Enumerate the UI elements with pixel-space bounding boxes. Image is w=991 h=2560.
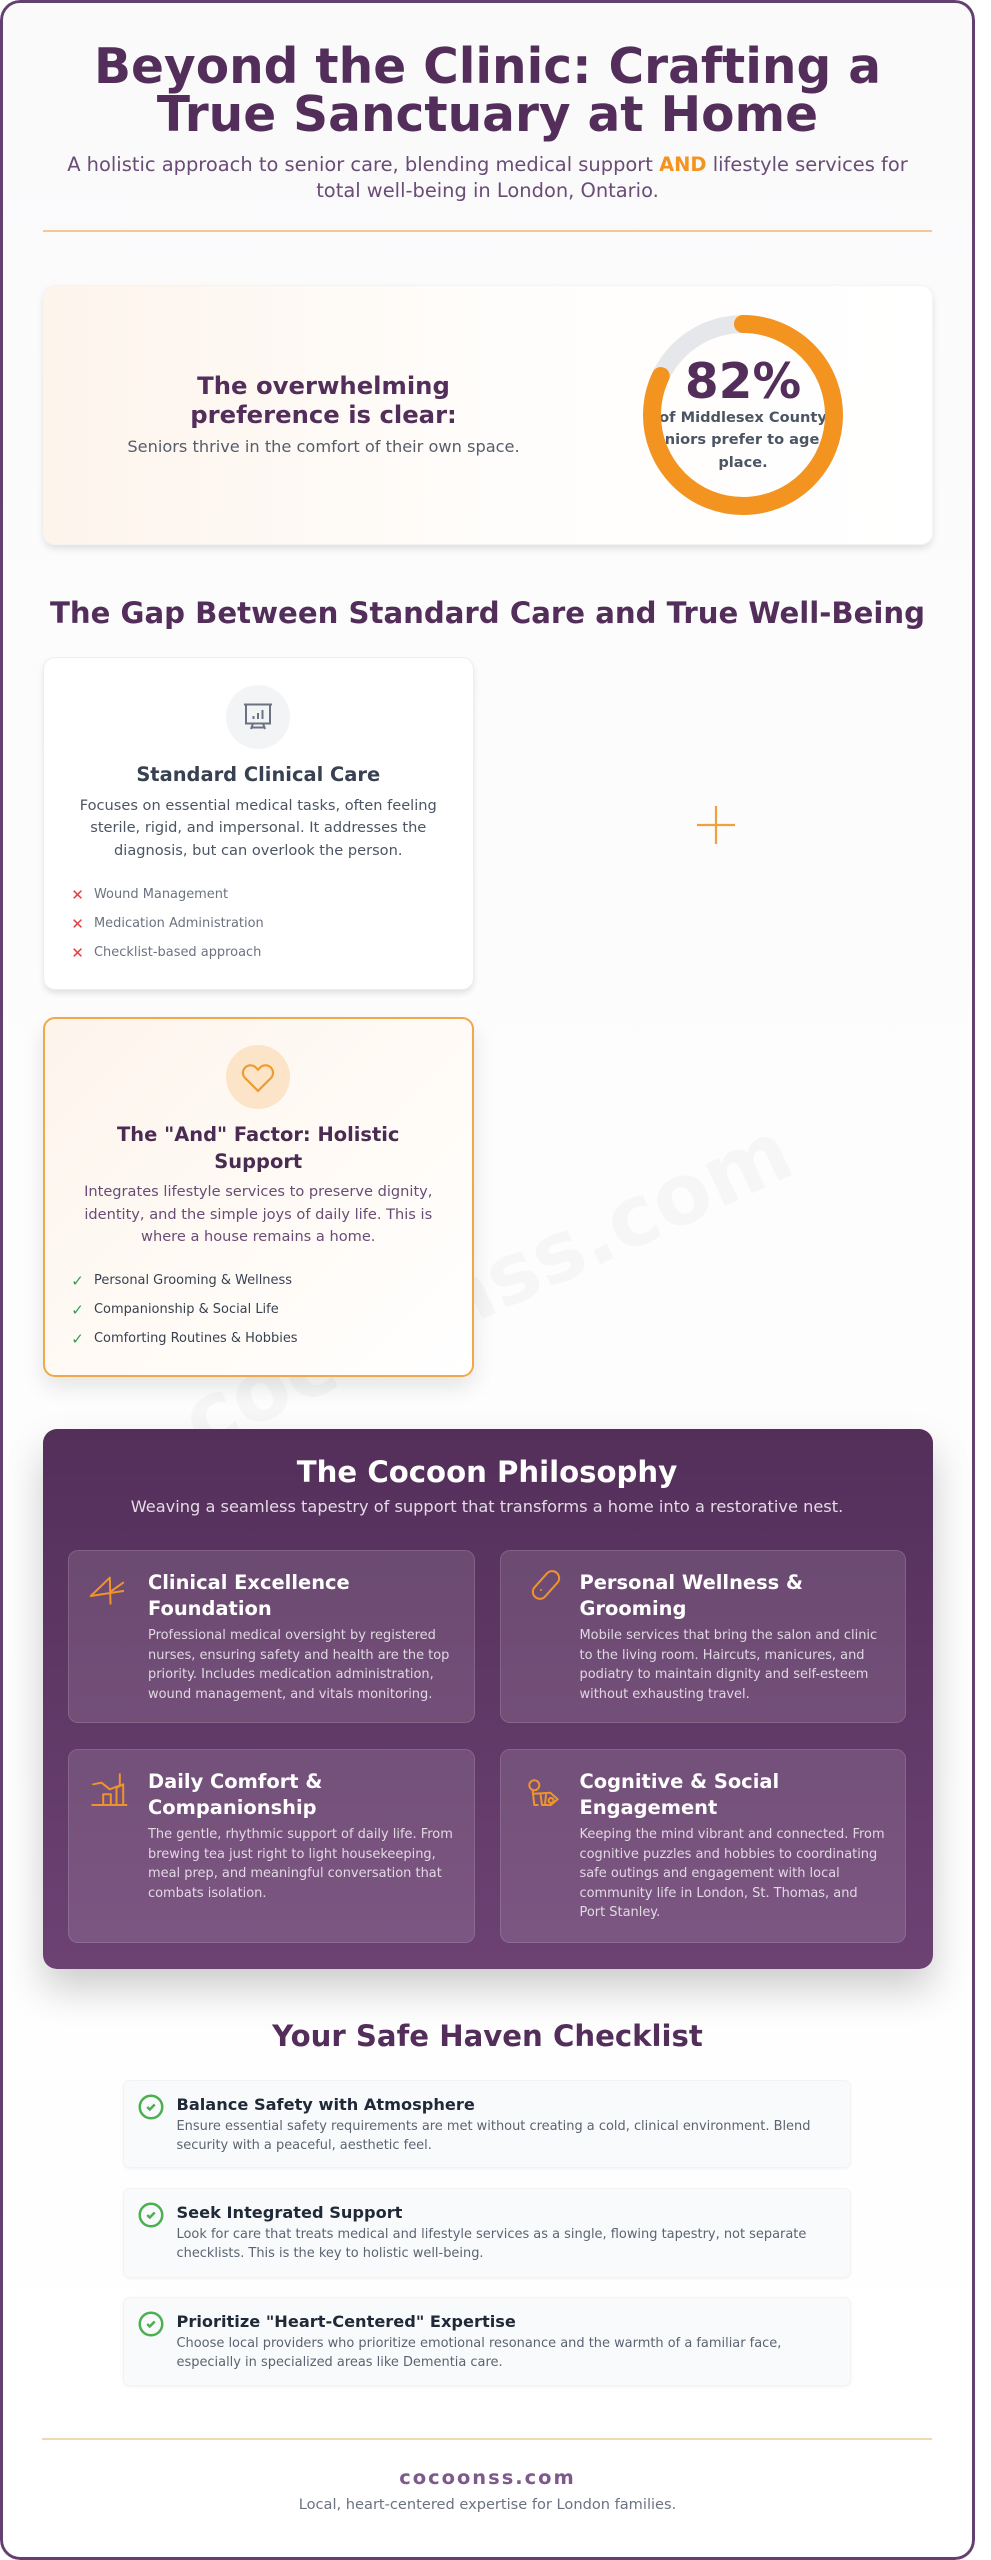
checklist item 1 xyxy=(123,2080,850,2168)
footer brand: cocoonss.com xyxy=(399,2466,576,2489)
panel subtitle: Weaving a seamless tapestry of support that transforms a home into a restorative nest. xyxy=(131,1496,843,1516)
card description: Focuses on essential medical tasks, often feeling xyxy=(80,797,437,814)
icon: pill xyxy=(532,1570,560,1600)
card text: wound management, and vitals monitoring. xyxy=(148,1687,432,1702)
stat subtext: Seniors thrive in the comfort of their own space. xyxy=(127,437,520,456)
panel heading: The Cocoon Philosophy xyxy=(297,1454,677,1488)
list: lifestyle services: Comforting Routines & Hobbies xyxy=(94,1331,298,1346)
card description xyxy=(84,1183,432,1245)
item text xyxy=(176,2118,810,2153)
donut chart: 82 percent xyxy=(643,315,843,515)
donut caption xyxy=(646,408,840,471)
card text: podiatry to maintain dignity and self-esteem xyxy=(580,1667,868,1682)
header divider xyxy=(43,230,932,232)
list: clinical tasks: Wound Management xyxy=(94,886,228,902)
card text: combats isolation. xyxy=(148,1886,267,1901)
card heading: Clinical Excellence xyxy=(148,1570,350,1594)
list: lifestyle services: Companionship & Social Life xyxy=(94,1302,279,1317)
list: clinical tasks: ✕ xyxy=(71,944,84,962)
card text: safe outings and engagement with local xyxy=(580,1866,840,1881)
card heading: Grooming xyxy=(580,1596,686,1620)
title: True Sanctuary at Home xyxy=(157,87,818,143)
watermark: cocoonss.com xyxy=(167,1101,807,1469)
card text: priority. Includes medication administration, xyxy=(148,1667,434,1682)
list: lifestyle services: ✓ xyxy=(71,1301,84,1319)
card text xyxy=(148,1827,453,1901)
card heading: Cognitive & Social xyxy=(580,1770,779,1792)
icon: check circle xyxy=(138,2202,164,2228)
footer tagline: Local, heart-centered expertise for London families. xyxy=(299,2496,676,2513)
card heading xyxy=(580,1570,803,1620)
stat heading xyxy=(190,370,457,428)
card text xyxy=(580,1827,885,1920)
card text: without exhausting travel. xyxy=(580,1687,750,1702)
card heading: The "And" Factor: Holistic xyxy=(117,1122,399,1146)
card description: where a house remains a home. xyxy=(141,1228,375,1245)
footer divider xyxy=(42,2438,932,2440)
list: clinical tasks xyxy=(71,886,264,962)
card heading: Foundation xyxy=(148,1596,272,1620)
card heading xyxy=(117,1122,399,1172)
item heading: Prioritize "Heart-Centered" Expertise xyxy=(176,2312,516,2331)
icon: puzzle xyxy=(528,1779,559,1806)
card text: Keeping the mind vibrant and connected. From xyxy=(580,1827,885,1842)
title xyxy=(94,39,881,143)
list: lifestyle services: ✓ xyxy=(71,1330,84,1348)
card heading: Support xyxy=(214,1150,302,1172)
card text: cognitive puzzles and hobbies to coordinating xyxy=(580,1847,877,1862)
list: lifestyle services: ✓ xyxy=(71,1272,84,1290)
subtitle xyxy=(67,153,908,202)
donut caption: of Middlesex County xyxy=(659,408,827,426)
list: lifestyle services: Personal Grooming & Wellness xyxy=(94,1273,292,1288)
card: cognitive and social xyxy=(500,1749,906,1943)
card heading: Companionship xyxy=(148,1796,317,1818)
card text: brewing tea just right to light housekeeping, xyxy=(148,1847,436,1862)
card: personal wellness xyxy=(500,1550,906,1723)
donut caption: seniors prefer to age in xyxy=(646,431,840,448)
card heading: Standard Clinical Care xyxy=(136,762,380,786)
card text xyxy=(580,1628,877,1702)
checklist item 3 xyxy=(123,2297,850,2386)
list: clinical tasks: Medication Administration xyxy=(94,916,264,930)
item text xyxy=(176,2226,806,2261)
section heading: checklist: Your Safe Haven Checklist xyxy=(272,2019,703,2053)
card heading: Personal Wellness & xyxy=(580,1570,803,1594)
subtitle: A holistic approach to senior care, blending medical support AND lifestyle services for xyxy=(67,153,908,176)
panel: standard clinical care xyxy=(42,657,474,990)
icon: check circle xyxy=(138,2094,164,2120)
list: clinical tasks: ✕ xyxy=(71,886,84,904)
list: clinical tasks: Checklist-based approach xyxy=(94,944,261,960)
card text: Port Stanley. xyxy=(580,1905,660,1920)
card heading: Daily Comfort & xyxy=(148,1770,322,1792)
item text: Look for care that treats medical and lifestyle services as a single, flowing tapestry, not separate xyxy=(176,2226,806,2242)
card text xyxy=(148,1628,449,1702)
checklist item 2 xyxy=(123,2188,850,2278)
donut value: 82% xyxy=(685,354,801,410)
icon: home xyxy=(91,1773,128,1806)
panel: cocoon philosophy xyxy=(42,1429,932,1969)
donut ring xyxy=(643,315,843,515)
card text: community life in London, St. Thomas, and xyxy=(580,1886,858,1901)
card text: nurses, ensuring safety and health are the top xyxy=(148,1648,449,1663)
icon: plus xyxy=(697,806,735,844)
panel: 82% statistic xyxy=(42,285,932,545)
card description: sterile, rigid, and impersonal. It addresses the xyxy=(90,819,426,836)
card heading: Engagement xyxy=(580,1796,717,1818)
card heading xyxy=(580,1770,779,1818)
section heading: the gap: The Gap Between Standard Care and True Well-Being xyxy=(50,596,925,630)
card description xyxy=(80,797,437,859)
item heading: Seek Integrated Support xyxy=(176,2203,402,2222)
item text: Choose local providers who prioritize emotional resonance and the warmth of a familiar face, xyxy=(176,2336,781,2350)
card text: The gentle, rhythmic support of daily life. From xyxy=(148,1827,453,1842)
card heading xyxy=(148,1570,350,1620)
card description: diagnosis, but can overlook the person. xyxy=(114,842,402,859)
title: Beyond the Clinic: Crafting a xyxy=(94,39,881,95)
item text: especially in specialized areas like Dementia care. xyxy=(176,2355,503,2370)
card: daily comfort xyxy=(68,1749,474,1943)
icon: heart xyxy=(226,1045,290,1109)
item text: Ensure essential safety requirements are met without creating a cold, clinical environment. Blend xyxy=(176,2118,810,2134)
card description: identity, and the simple joys of daily life. This is xyxy=(84,1206,432,1223)
stat heading: preference is clear: xyxy=(190,400,457,428)
list: clinical tasks: ✕ xyxy=(71,914,84,932)
item text: security with a peaceful, aesthetic feel. xyxy=(176,2138,432,2153)
card heading xyxy=(148,1770,322,1818)
list: lifestyle services xyxy=(71,1272,298,1348)
card text: to the living room. Haircuts, manicures, and xyxy=(580,1648,865,1663)
icon: check circle xyxy=(138,2312,164,2336)
subtitle: total well-being in London, Ontario. xyxy=(316,179,659,202)
card text: Mobile services that bring the salon and clinic xyxy=(580,1628,877,1643)
item heading: Balance Safety with Atmosphere xyxy=(176,2095,475,2114)
stat heading: The overwhelming xyxy=(197,370,450,400)
card text: Professional medical oversight by registered xyxy=(148,1628,436,1643)
icon: medical xyxy=(90,1576,124,1605)
panel: holistic support xyxy=(42,1017,474,1377)
icon: presentation chart xyxy=(226,685,290,749)
card text: meal prep, and meaningful conversation that xyxy=(148,1866,442,1881)
item text xyxy=(176,2336,781,2370)
card: clinical excellence xyxy=(68,1550,474,1723)
item text: checklists. This is the key to holistic well-being. xyxy=(176,2246,484,2261)
card description: Integrates lifestyle services to preserve dignity, xyxy=(84,1183,432,1200)
donut caption: place. xyxy=(718,454,768,471)
